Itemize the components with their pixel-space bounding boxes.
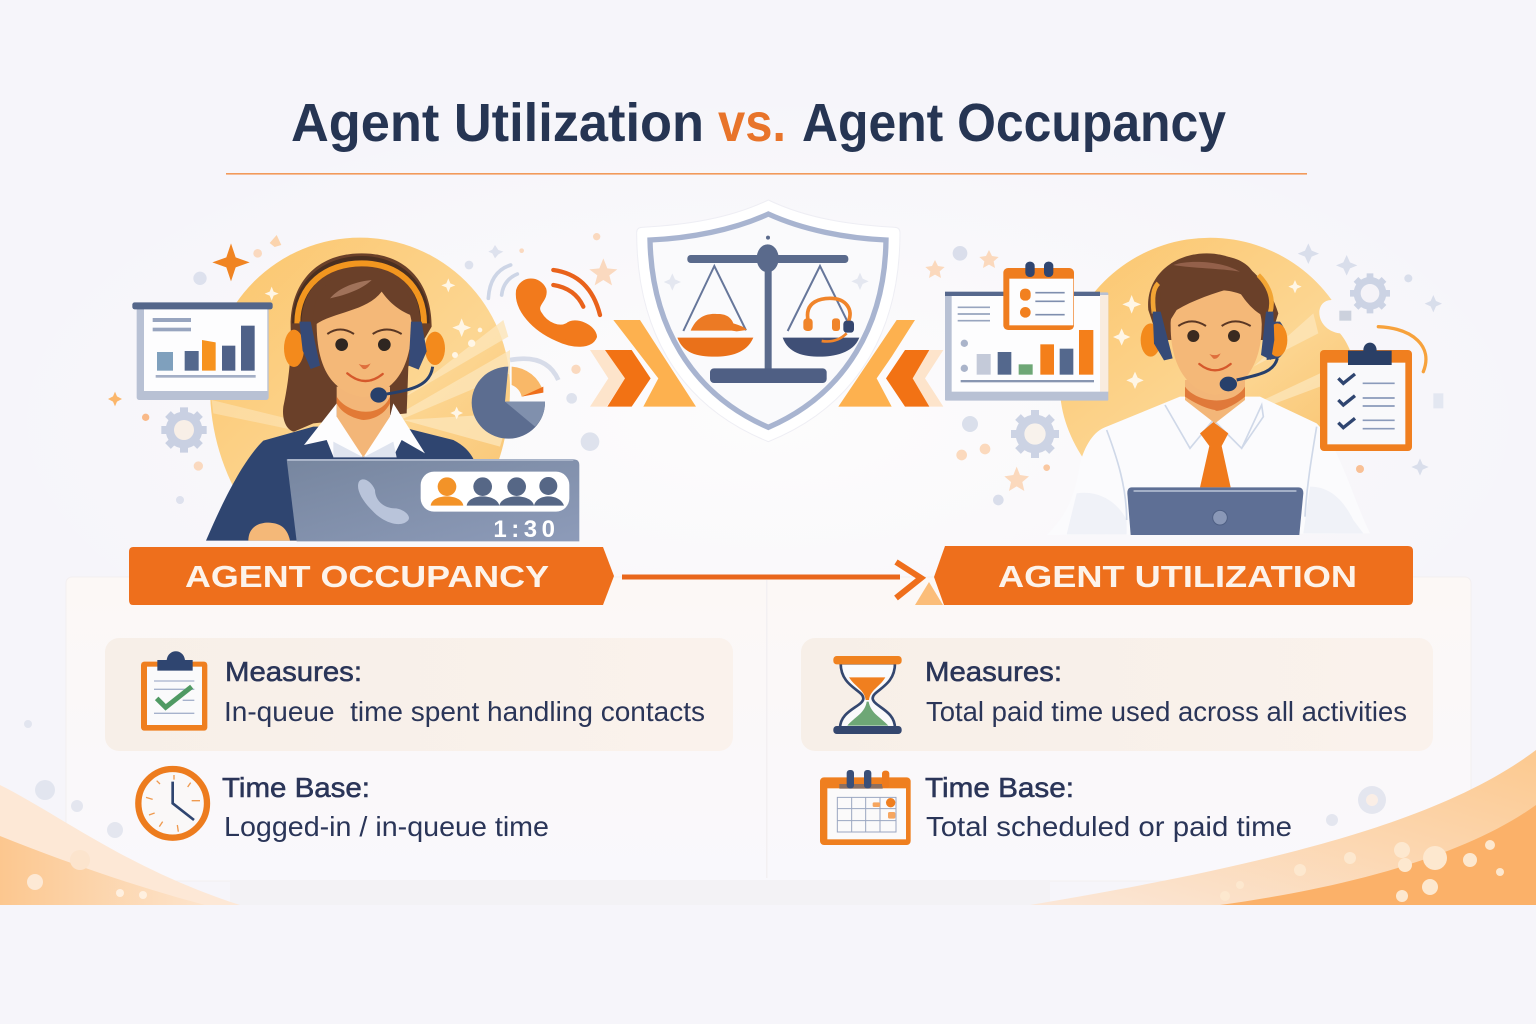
banner: agent occupancy: AGENT OCCUPANCY (185, 559, 549, 594)
clipboard (1320, 311, 1426, 451)
text: occupancy time base: Logged-in / in-queue time (224, 811, 549, 842)
row background: utilization measures (801, 638, 1433, 751)
sun circle (1060, 238, 1357, 463)
text: utilization time base: Time Base: (925, 772, 1074, 803)
headset (1141, 275, 1287, 391)
shield (637, 200, 900, 442)
neck and blazer (206, 387, 474, 541)
arrow: occupancy to utilization (622, 562, 943, 605)
calendar card (1003, 262, 1074, 330)
chevrons left and right (590, 320, 943, 407)
background wave: right (1030, 750, 1536, 905)
title: Agent Occupancy (802, 93, 1226, 153)
text: utilization measures: Total paid time used across all activities (926, 696, 1407, 727)
icon: clipboard check (141, 651, 207, 731)
chart board (132, 302, 273, 400)
laptop: 1:30 (493, 516, 555, 543)
text: occupancy measures: Measures: (225, 656, 362, 687)
text: utilization measures: Measures: (925, 656, 1062, 687)
text: occupancy measures: In-queue time spent handling contacts (224, 696, 705, 727)
decorative confetti lower (24, 720, 1386, 838)
panel: comparison background (66, 577, 1471, 905)
face (1148, 253, 1278, 395)
shirt (1047, 380, 1370, 535)
dashboard board (945, 292, 1108, 401)
hair back (283, 253, 432, 432)
gear (161, 407, 207, 453)
banner: agent occupancy (129, 547, 614, 605)
icon: hourglass (833, 656, 902, 734)
laptop (248, 459, 579, 543)
icon: clock (138, 769, 207, 838)
text: utilization measures (925, 656, 1407, 727)
title: Agent Utilization (291, 93, 704, 153)
title (291, 93, 1226, 153)
banner: agent utilization: AGENT UTILIZATION (998, 559, 1357, 594)
center emblem: shield with scales (590, 200, 943, 442)
gear (1011, 273, 1390, 458)
text: occupancy measures (224, 656, 705, 727)
text: utilization time base: Total scheduled or paid time (926, 811, 1292, 842)
banner: agent utilization (934, 546, 1413, 605)
text: occupancy time base: Time Base: (222, 772, 370, 803)
laptop (1127, 487, 1303, 535)
text: utilization time base (925, 772, 1292, 842)
icon: phone receiver (488, 265, 600, 344)
icon: calendar (820, 770, 911, 845)
row background: occupancy measures (105, 638, 733, 751)
sun circle (210, 238, 510, 541)
headset (284, 261, 445, 403)
decorative confetti left (108, 233, 617, 504)
balance scale (664, 236, 869, 383)
title: vs. (718, 93, 786, 153)
illustration: utilization agent (925, 238, 1443, 535)
face (313, 268, 415, 397)
illustration: occupancy agent (108, 233, 617, 543)
pie chart (472, 359, 558, 439)
decorative confetti right (925, 243, 1443, 505)
background wave: left (0, 785, 240, 905)
text: occupancy time base (222, 772, 549, 842)
